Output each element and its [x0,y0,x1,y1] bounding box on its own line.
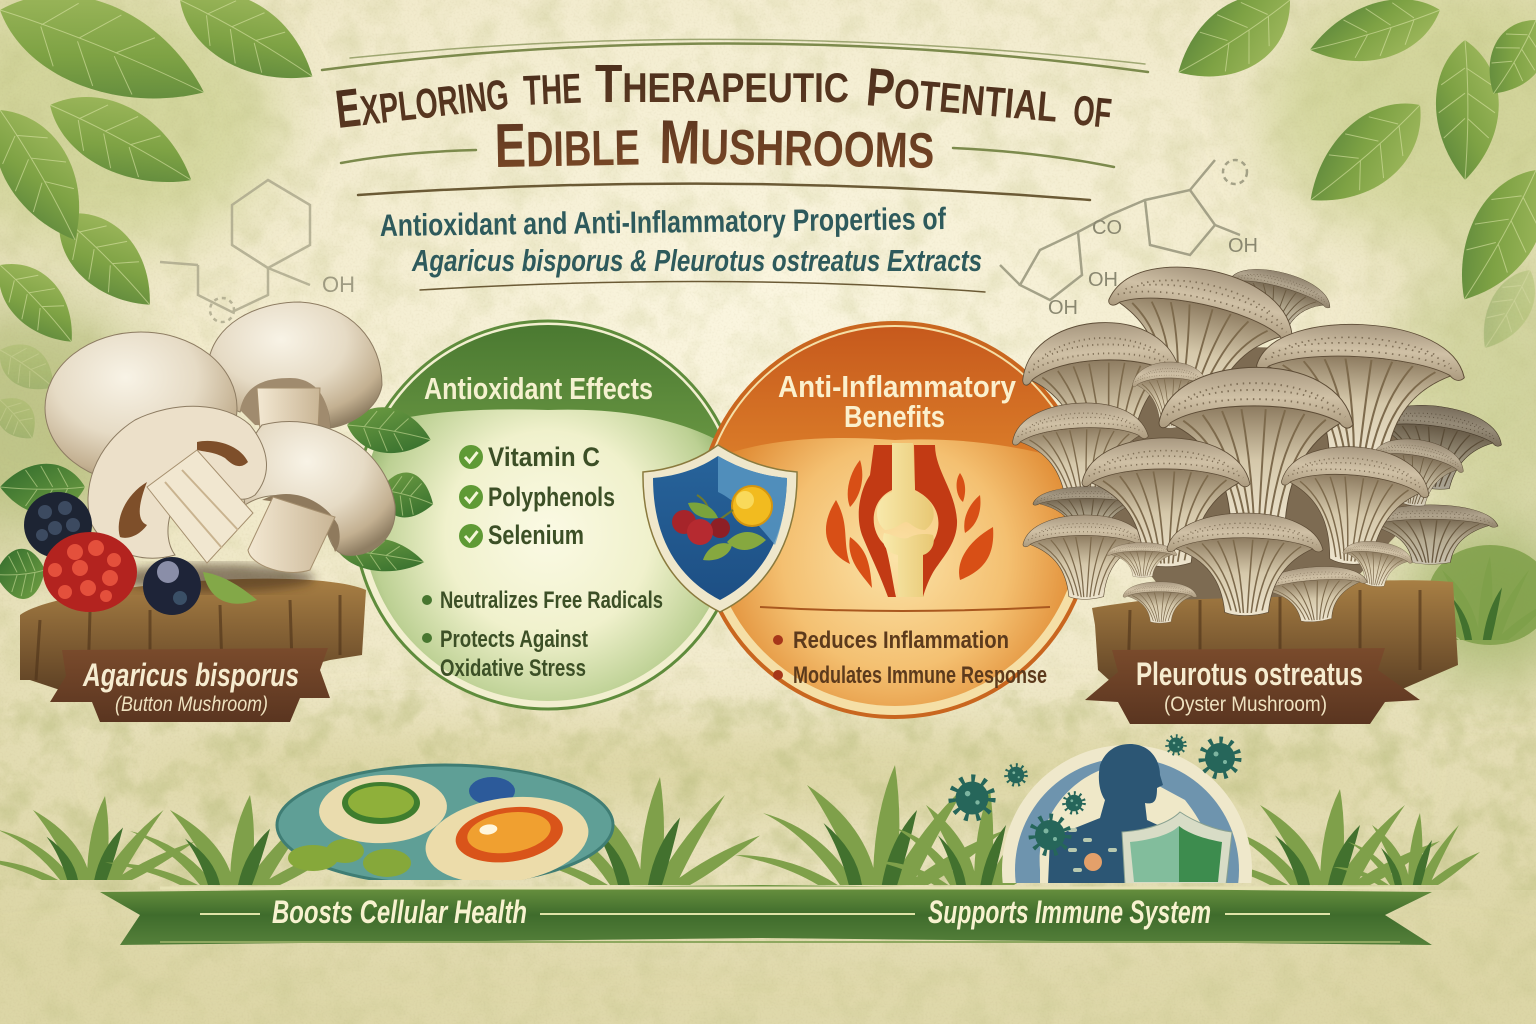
molecule right: OH [1228,235,1258,257]
green blobs [288,839,411,877]
molecule left [160,180,355,322]
antioxidant heading band [391,325,718,438]
label: Agaricus bisporus: Agaricus bisporus [82,657,299,693]
subtitle line 1: Antioxidant and Anti-Inflammatory Properties of [380,201,947,243]
back right mushroom [208,302,382,430]
orange cell [426,796,588,880]
antioxidant benefits list [422,587,663,682]
title line 2: EDIBLE [494,109,640,181]
oyster mushroom cluster [1011,251,1505,626]
panel: anti-inflammatory circle [708,321,1078,719]
title line 1: THE [522,65,582,114]
molecule left: OH [322,272,355,297]
icon: cells [277,765,613,893]
molecule right: CO [1092,217,1122,239]
green shield [1122,812,1232,885]
icon: immune system [952,736,1252,995]
leaves: top left corner [0,0,330,358]
stump right [1092,580,1458,690]
front right mushroom [243,422,395,572]
subtitle line 2: Agaricus bisporus & Pleurotus ostreatus Extracts [411,243,982,278]
label: Pleurotus ostreatus [1085,648,1420,724]
grass tufts [0,765,1480,885]
title line 2: MUSHROOMS [659,108,935,182]
title line 2 [494,108,935,182]
antioxidant benefits list: Protects Against [440,626,588,653]
berries [24,492,257,615]
title line 1 [332,54,1114,140]
cut mushroom [88,406,266,563]
antioxidant compound list: Polyphenols [488,482,615,512]
title [332,54,1114,182]
molecule right: OH [1048,297,1078,319]
title line 1: OF [1071,86,1114,137]
title rules [322,39,1148,292]
anti-inflammatory benefits list: Modulates Immune Response [793,662,1047,689]
antioxidant compound list: Vitamin C [488,442,600,472]
label: Agaricus bisporus: (Button Mushroom) [115,693,268,716]
antioxidant compound list: Selenium [488,520,584,550]
stump left [20,564,366,690]
anti-inflammatory benefits list [773,627,1047,689]
banner [100,885,1432,945]
green cell [317,772,449,846]
molecule right: OH [1088,269,1118,291]
anti-inflammatory heading: Anti-Inflammatory [778,369,1017,404]
inflammation divider [760,607,1050,611]
icon: shield with berries [643,445,797,612]
left mushrooms group [0,302,439,690]
antioxidant benefits list: Oxidative Stress [440,655,586,682]
title line 1: EXPLORING [332,60,511,140]
banner label: immune system: Supports Immune System [928,894,1211,930]
title line 1: POTENTIAL [864,57,1060,134]
icon: inflamed joint [826,443,993,597]
label: Agaricus bisporus [50,648,330,722]
leaves behind left mushrooms [0,401,439,601]
anti-inflammatory heading band [717,327,1052,453]
blue vesicle [469,777,515,805]
viruses [952,736,1238,853]
antioxidant heading: Antioxidant Effects [424,371,653,406]
molecule right [1000,160,1258,319]
back left mushroom [45,332,237,484]
anti-inflammatory heading [778,369,1017,434]
label: Pleurotus ostreatus: (Oyster Mushroom) [1164,693,1327,716]
right mushrooms group [1011,251,1536,690]
panel: antioxidant circle [359,320,721,710]
anti-inflammatory heading: Benefits [844,399,945,434]
anti-inflammatory benefits list: Reduces Inflammation [793,627,1009,654]
subtitle [380,201,982,278]
grass behind stump [1403,545,1536,645]
antioxidant benefits list: Neutralizes Free Radicals [440,587,663,614]
antioxidant compound list [459,442,615,550]
faint background leaves [0,261,1536,449]
banner label: cellular health: Boosts Cellular Health [272,894,527,930]
title line 1: THERAPEUTIC [595,54,849,114]
label: Pleurotus ostreatus: Pleurotus ostreatus [1136,656,1363,692]
leaves: top right corner [1162,0,1536,316]
